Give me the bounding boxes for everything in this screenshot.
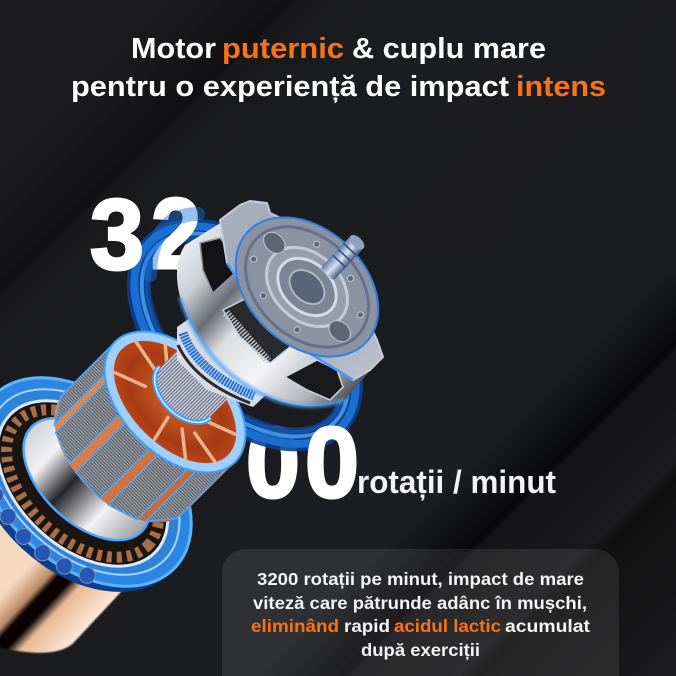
title: pentru o experiență de impact [71, 71, 509, 103]
blue wall glow [180, 297, 345, 406]
gear flange [220, 201, 383, 380]
number 3200, digits in front of swirl [90, 178, 359, 519]
window left [200, 238, 237, 293]
translucent swirl over the digit 2 [150, 214, 198, 275]
description text: acumulat [505, 616, 590, 636]
copper winding face [78, 305, 272, 499]
description text: după exerciții [361, 640, 480, 660]
commutator [142, 345, 232, 435]
title: Motor [131, 33, 216, 65]
flange rim glow [227, 263, 353, 380]
neck [177, 318, 268, 407]
description text: viteză care pătrunde adânc în mușchi, [253, 593, 587, 613]
coil ring and copper tube [0, 337, 231, 676]
description text: eliminând [251, 616, 339, 636]
description text: rapid [344, 616, 390, 636]
number 3200, first zero behind swirl: 0 [246, 407, 300, 519]
description text [251, 569, 590, 660]
bell wall [177, 222, 372, 406]
bell face [208, 189, 406, 385]
face cut-outs [231, 212, 383, 362]
number 3200, digits in front of swirl: 3 [90, 179, 144, 291]
description panel [222, 549, 619, 676]
rotor assembly [29, 305, 272, 548]
title: & cuplu mare [352, 33, 546, 65]
number 3200, digits in front of swirl: 2 [151, 178, 201, 290]
stator core [29, 342, 235, 548]
stator laminations [30, 345, 231, 547]
shaft [320, 232, 367, 281]
blue swirl ring behind the bell [94, 185, 396, 485]
title: puternic [222, 33, 344, 65]
title [71, 33, 606, 103]
blue outer ring [0, 337, 231, 634]
title: intens [516, 71, 606, 103]
description text: 3200 rotații pe minut, impact de mare [257, 569, 584, 589]
battery cells around ring [0, 461, 103, 598]
copper tube [0, 422, 145, 676]
number 3200, digits in front of swirl: 0 [305, 407, 359, 519]
window middle with teeth [223, 298, 290, 363]
motor bell [177, 189, 406, 406]
description text: acidul lactic [394, 616, 501, 636]
window right [285, 360, 343, 400]
unit label: rotații / minut [357, 464, 556, 500]
